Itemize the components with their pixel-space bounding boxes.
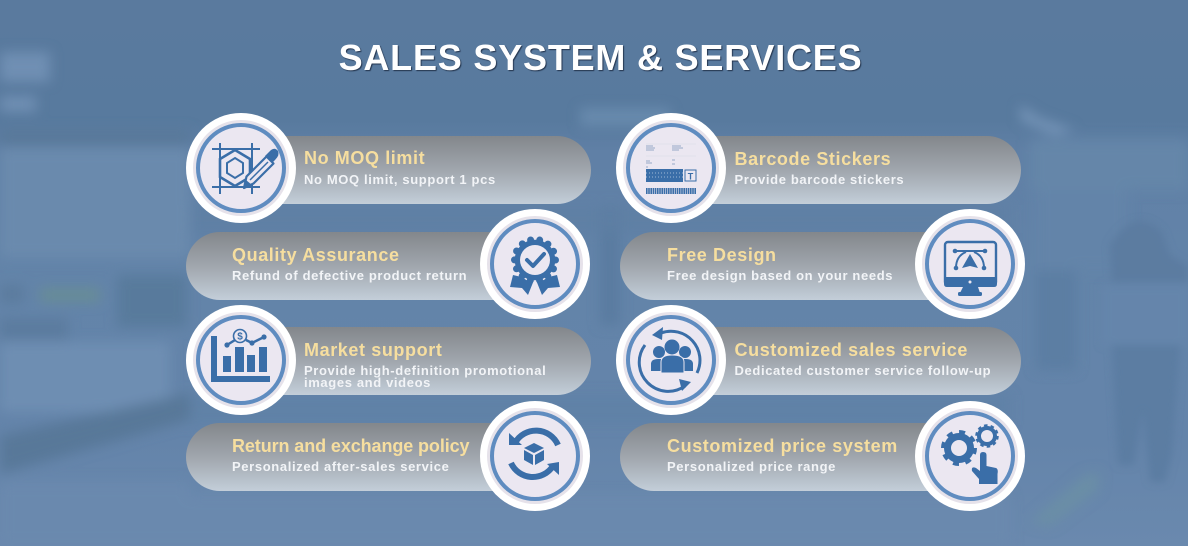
title: SALES SYSTEM & SERVICES — [339, 37, 862, 78]
icon: barcode label: T — [688, 172, 694, 182]
description — [304, 363, 546, 390]
heading: Free Design — [667, 245, 777, 265]
card: Free Design — [620, 209, 1025, 319]
description: Personalized price range — [667, 459, 836, 474]
card: Customized price system — [620, 401, 1025, 511]
description: Personalized after-sales service — [232, 459, 449, 474]
icon: bar chart with dollar — [186, 305, 296, 415]
heading: Customized price system — [667, 436, 898, 456]
pill background — [656, 136, 1021, 204]
description: Provide barcode stickers — [734, 172, 904, 187]
heading: No MOQ limit — [304, 148, 425, 168]
heading: Barcode Stickers — [734, 149, 891, 169]
icon: blueprint pencil — [186, 113, 296, 223]
heading: Customized sales service — [734, 340, 968, 360]
pill background — [186, 423, 546, 491]
icon: quality badge — [480, 209, 590, 319]
icon: customer team cycle — [616, 305, 726, 415]
description: Provide high-definition promotional — [304, 363, 546, 378]
icon: barcode label — [616, 113, 726, 223]
pill background — [620, 232, 980, 300]
icon: design monitor — [915, 209, 1025, 319]
description: Dedicated customer service follow-up — [734, 363, 991, 378]
card: Return and exchange policy — [186, 401, 590, 511]
heading: Return and exchange policy — [232, 436, 469, 456]
heading: Market support — [304, 340, 442, 360]
description: Refund of defective product return — [232, 268, 467, 283]
pill background — [656, 327, 1021, 395]
pill background — [226, 136, 591, 204]
icon: return box arrows — [480, 401, 590, 511]
heading: Quality Assurance — [232, 245, 400, 265]
card: Quality Assurance — [186, 209, 590, 319]
icon: bar chart with dollar: $ — [237, 332, 243, 342]
card: Market support — [186, 305, 591, 415]
pill background — [620, 423, 980, 491]
description: No MOQ limit, support 1 pcs — [304, 172, 496, 187]
card: Barcode Stickers — [616, 113, 1021, 498]
description: Free design based on your needs — [667, 268, 893, 283]
icon: gears and pointing hand — [915, 401, 1025, 511]
description: images and videos — [304, 374, 431, 390]
pill background — [226, 327, 591, 395]
card: Customized sales service — [616, 305, 1021, 415]
card: No MOQ limit — [186, 113, 591, 498]
pill background — [186, 232, 546, 300]
